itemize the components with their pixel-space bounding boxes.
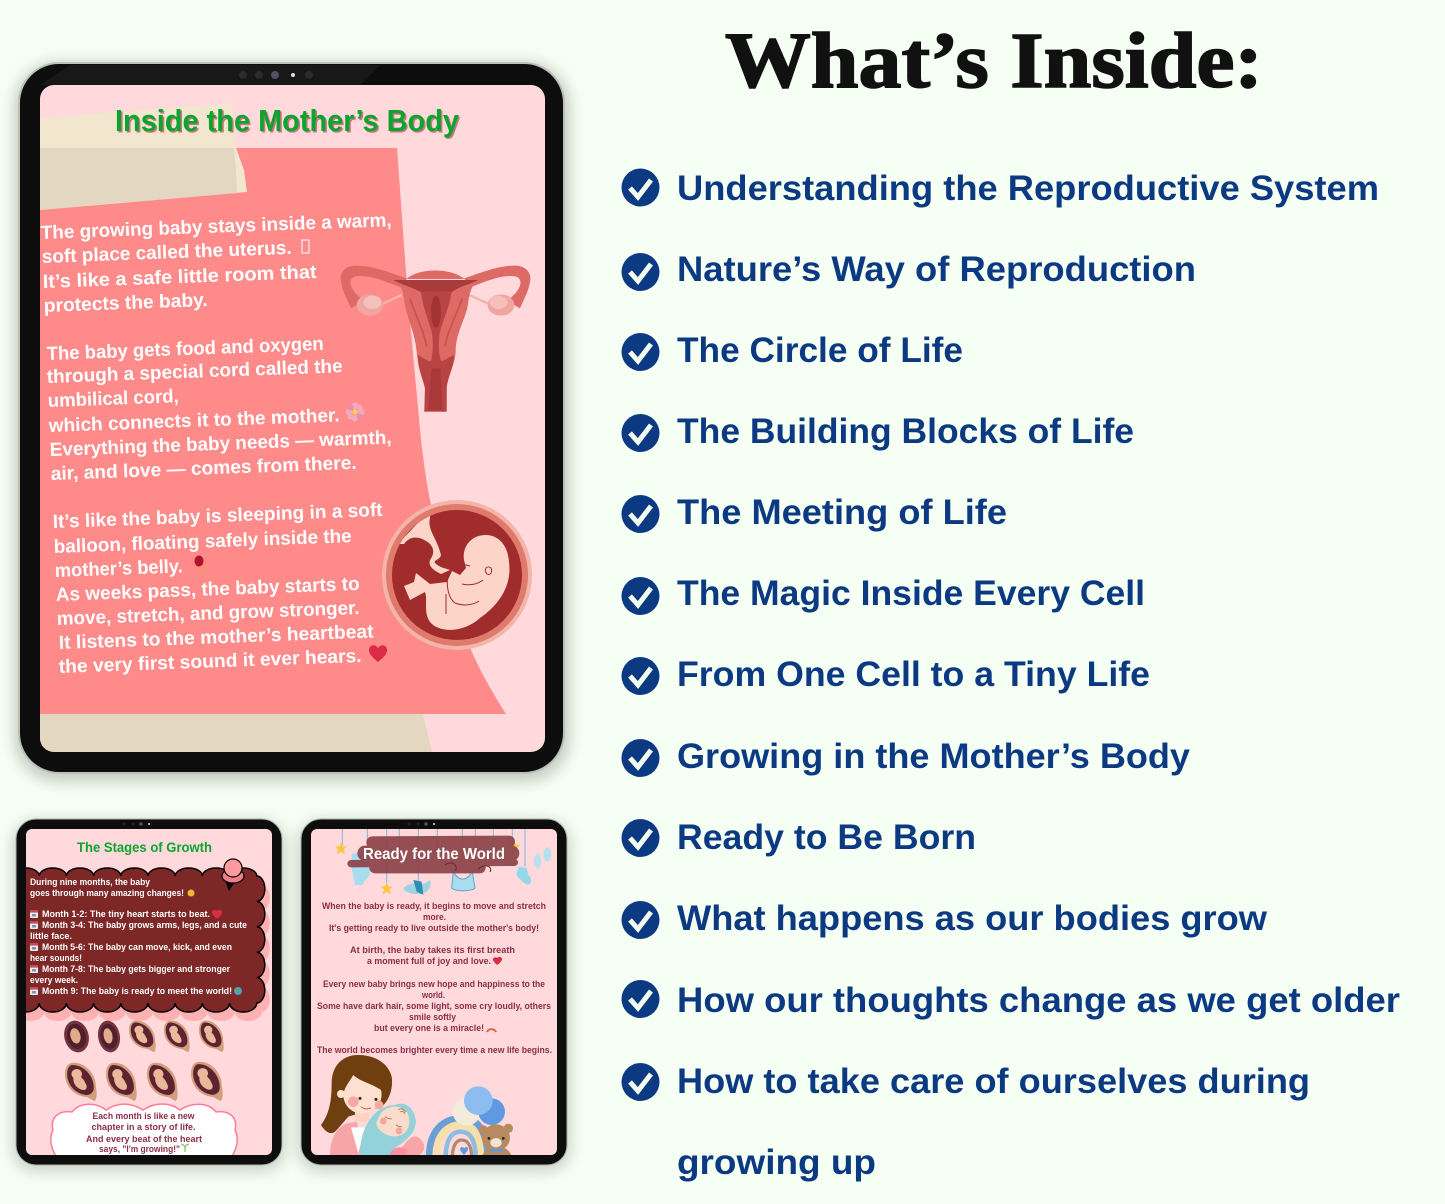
body text: It’s like a safe little room that [42,262,318,293]
icon: sock [516,867,531,884]
screen text: When the baby is ready, it begins to move and stretch [322,901,546,911]
beige band bottom [40,714,432,752]
checklist [622,168,1400,1182]
illustration: mother and baby [321,1055,424,1157]
panel text: Month 3-4: The baby grows arms, legs, and a cute [42,920,247,930]
item 6: The Magic Inside Every Cell [677,574,1145,613]
body text: soft place called the uterus. [41,238,292,268]
small tablet: Ready for the World [297,819,571,1172]
item 12 [622,1062,1310,1182]
body text: Everything the baby needs — warmth, [49,427,392,461]
screen text: Every new baby brings new hope and happiness to the [323,979,545,989]
icon: balloon [194,556,205,574]
panel text: little face. [30,931,72,941]
title banner [351,842,514,872]
scalloped dark panel [12,868,265,1012]
cloud callout: And every beat of the heart [86,1134,202,1144]
panel text [30,877,247,996]
panel text: Month 7-8: The baby gets bigger and stronger [42,964,230,974]
screen text: a moment full of joy and love. [367,956,491,966]
body text [40,210,392,678]
panel text: goes through many amazing changes! [30,888,184,898]
item 1: Understanding the Reproductive System [677,169,1379,208]
body text: through a special cord called the [46,356,343,388]
illustration: uterus [341,266,530,412]
screen title: Inside the Mother’s Body [115,103,460,138]
main tablet [14,62,570,782]
screen content [311,828,557,1158]
item 2: Nature’s Way of Reproduction [677,250,1196,289]
item 12: How to take care of ourselves during [677,1062,1310,1101]
icon: pin [222,859,244,891]
icon: bib [452,871,475,891]
heading: What's Inside: What’s Inside: [725,18,1263,105]
screen text: The world becomes brighter every time a new life begins. [317,1045,552,1055]
body text: umbilical cord, [47,386,179,412]
body text: protects the baby. [43,290,208,317]
body text: The growing baby stays inside a warm, [40,210,392,244]
tablet screen: Inside the Mother's Body [40,85,545,752]
fetus stages row 1 [64,1020,224,1052]
icon: footprints [534,847,551,868]
small tablet: The Stages of Growth [12,819,286,1172]
screen title: Inside the Mother’s Body [116,104,461,140]
screen text: more. [423,912,446,922]
icon: flower [346,402,364,422]
panel text: Month 1-2: The tiny heart starts to beat. [42,909,210,919]
screen content [12,829,272,1160]
cloud callout: says, "I'm growing!" [99,1144,180,1154]
icon: onesie [352,853,370,885]
panel text: Month 9: The baby is ready to meet the world! [42,986,232,996]
item 3: The Circle of Life [677,331,963,370]
cloud callout [51,1104,237,1160]
body text: air, and love — comes from there. [50,453,357,485]
body text: It’s like the baby is sleeping in a soft [52,500,384,533]
hanging strings [342,828,525,883]
title banner: Ready for the World [363,846,505,863]
icon: missing glyph box [302,240,309,253]
panel text: Month 5-6: The baby can move, kick, and even [42,942,232,952]
screen text: world. [421,990,445,1000]
item 8: Growing in the Mother’s Body [677,737,1191,776]
screen text: smile softly [409,1012,456,1022]
hanging decorations [335,828,551,895]
screen text: Some have dark hair, some light, some cry loudly, others [317,1001,551,1011]
icon: heart [369,645,387,662]
item 10: What happens as our bodies grow [677,899,1268,938]
body text: which connects it to the mother. [47,405,340,437]
screen text [317,901,552,1055]
salmon paper panel [40,148,506,714]
panel text: every week. [30,975,78,985]
item 11: How our thoughts change as we get older [677,981,1400,1020]
cloud callout: chapter in a story of life. [92,1122,196,1132]
body text: the very first sound it ever hears. [58,646,362,678]
body text: The baby gets food and oxygen [46,334,324,365]
panel text: hear sounds! [30,953,82,963]
body text: balloon, floating safely inside the [53,526,352,558]
illustration: fetus in womb [382,500,532,650]
screen text: It's getting ready to live outside the mother's body! [329,923,539,933]
screen text: but every one is a miracle! [374,1023,484,1033]
screen title: The Stages of Growth [77,840,212,855]
beige tape top [40,103,247,210]
panel text: During nine months, the baby [30,877,150,887]
body text: It listens to the mother’s heartbeat [58,621,375,654]
icon: toy plane [403,880,431,895]
item 4: The Building Blocks of Life [677,412,1134,451]
body text: move, stretch, and grow stronger. [56,598,360,630]
item 5: The Meeting of Life [677,493,1007,532]
icon: stars [335,841,520,894]
item 7: From One Cell to a Tiny Life [677,655,1150,694]
illustration: balloons, rainbow and teddy [429,1086,513,1158]
scalloped shadow [17,877,270,1021]
fetus stages row 2 [65,1062,223,1101]
body text: mother’s belly. [54,556,183,582]
body text: As weeks pass, the baby starts to [55,574,360,606]
item 12: growing up [677,1143,876,1182]
item 9: Ready to Be Born [677,818,976,857]
cloud callout: Each month is like a new [92,1111,195,1121]
screen text: At birth, the baby takes its first breath [350,945,515,955]
